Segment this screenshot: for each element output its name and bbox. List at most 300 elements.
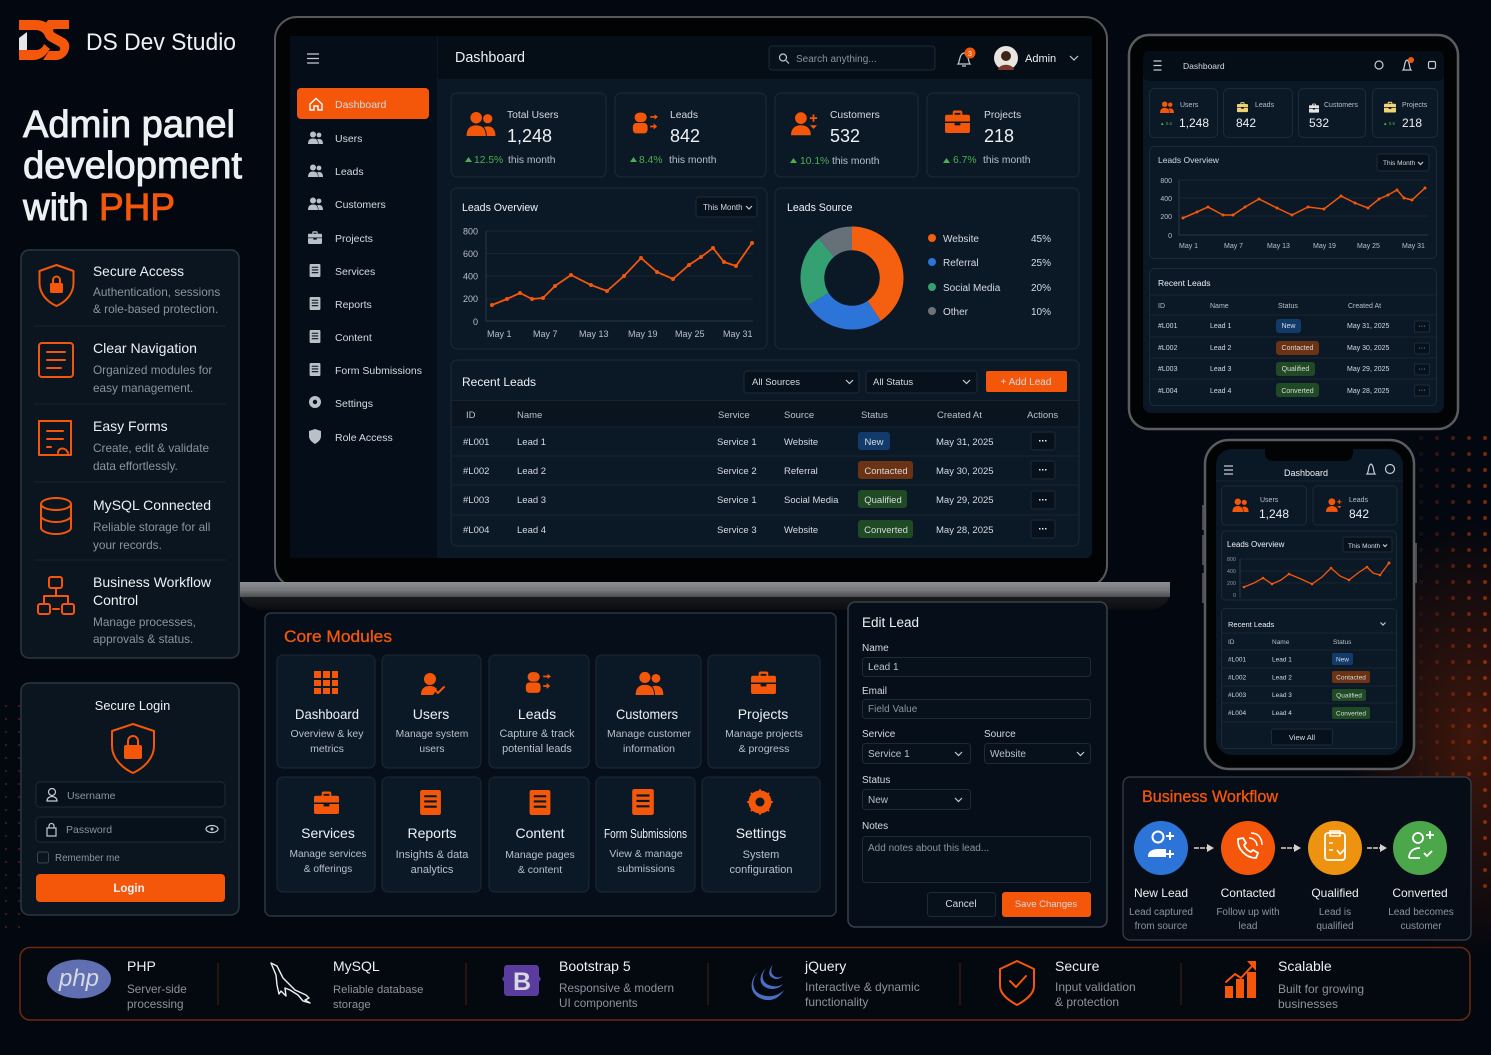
table: recent leads: Referral [784, 466, 818, 477]
table: recent leads: All Status [873, 377, 913, 388]
tech: Scalable: businesses [1278, 997, 1338, 1011]
laptop [240, 17, 1170, 610]
donut chart: leads source: Other [943, 307, 969, 318]
tablet table: Name [1210, 303, 1229, 310]
title [22, 104, 242, 229]
line chart: leads overview: May 7 [533, 329, 558, 339]
tech: jQuery [752, 958, 920, 1009]
tablet line chart: 400 [1160, 196, 1172, 203]
phone line chart: 0 [1233, 593, 1236, 599]
panel: secure login [21, 683, 239, 915]
module: Form Submissions: submissions [617, 863, 675, 875]
donut chart: leads source [775, 188, 1079, 349]
feature: MySQL Connected: your records. [93, 538, 162, 552]
module: Form Submissions [596, 777, 695, 892]
table: recent leads: #L001 [463, 437, 489, 448]
panel: core modules: Core Modules [284, 627, 392, 646]
line chart: leads overview: May 25 [675, 329, 705, 339]
module: Settings: configuration [730, 864, 792, 876]
stat: projects: 6.7% [953, 155, 976, 166]
step: Qualified: Lead is [1319, 907, 1351, 918]
tablet table: #L004 [1158, 388, 1178, 395]
tech: Scalable: Built for growing [1278, 982, 1364, 996]
module: Projects: Projects [738, 706, 788, 722]
phone table: Lead 1 [1272, 656, 1292, 664]
step: New Lead: New Lead [1134, 886, 1188, 900]
tech: Secure: Input validation [1055, 980, 1136, 994]
tech: Secure [1000, 958, 1136, 1009]
stat: total users [451, 93, 606, 177]
phone table: #L001 [1228, 656, 1246, 664]
step: New Lead [1129, 821, 1193, 932]
module: Services: Manage services [289, 849, 367, 860]
step: Converted: customer [1400, 921, 1442, 932]
phone table: Contacted [1336, 674, 1366, 682]
sidebar: Customers [335, 199, 386, 211]
donut chart: leads source: Leads Source [787, 202, 852, 214]
panel: edit lead form: Website [990, 749, 1026, 760]
input: username [36, 782, 225, 807]
step: Contacted [1216, 821, 1280, 932]
tablet stat cards: Customers [1324, 102, 1358, 109]
tablet [1129, 35, 1458, 429]
phone line chart: This Month [1348, 543, 1381, 550]
table: recent leads: + Add Lead [1001, 377, 1051, 388]
tablet line chart: Leads Overview [1158, 155, 1220, 165]
step: Qualified: qualified [1316, 921, 1354, 932]
arrow [1281, 844, 1301, 852]
tablet table: #L001 [1158, 323, 1178, 330]
line chart: leads overview: 400 [463, 272, 478, 282]
tablet stat cards: 842 [1236, 116, 1256, 130]
sidebar: Form Submissions [335, 365, 422, 377]
stat: projects: Projects [984, 110, 1021, 121]
tech: MySQL [271, 958, 423, 1011]
checkbox: remember me: Remember me [55, 853, 120, 864]
module: Reports: Reports [407, 825, 457, 841]
sidebar: Role Access [335, 432, 393, 444]
arrow [1194, 844, 1214, 852]
table: recent leads: May 31, 2025 [936, 437, 994, 448]
table: recent leads: Lead 4 [517, 525, 546, 536]
table: recent leads [451, 360, 1079, 546]
tech: Bootstrap 5 [502, 958, 674, 1010]
tablet table: May 28, 2025 [1347, 388, 1390, 395]
panel: business workflow [1123, 777, 1471, 940]
panel: secure login: Secure Login [95, 698, 170, 713]
sidebar: Users [335, 133, 362, 145]
table: recent leads: New [864, 437, 884, 448]
input: password [36, 817, 225, 842]
feature: Business Workflow Control [38, 574, 212, 646]
line chart: leads overview: Leads Overview [462, 202, 538, 214]
stat: projects: 218 [984, 126, 1014, 146]
feature: Clear Navigation [39, 340, 212, 395]
donut chart: leads source: 45% [1031, 234, 1051, 245]
phone table: #L003 [1228, 692, 1246, 699]
button: login [36, 874, 225, 902]
phone stat cards: Leads [1349, 497, 1369, 504]
module: Reports: Insights & data [396, 849, 469, 861]
tablet stat cards: Leads [1255, 102, 1275, 109]
module: Leads: potential leads [502, 743, 572, 755]
stat: total users: this month [508, 155, 556, 166]
table: recent leads: #L002 [463, 466, 489, 477]
feature: MySQL Connected: MySQL Connected [93, 497, 211, 513]
feature: Clear Navigation: Clear Navigation [93, 340, 197, 356]
table: recent leads: #L004 [463, 525, 489, 536]
module: Projects: & progress [739, 743, 789, 755]
table: recent leads: #L003 [463, 495, 489, 506]
step: Converted: Converted [1392, 886, 1448, 900]
phone table: Converted [1336, 710, 1366, 718]
tablet stat cards: ▲ 0.6 [1160, 121, 1172, 126]
step: Contacted: lead [1239, 921, 1257, 932]
line chart: leads overview: 600 [463, 249, 478, 259]
module: Settings: Settings [736, 825, 786, 841]
step: New Lead: Lead captured [1129, 907, 1193, 918]
line chart: leads overview [451, 188, 767, 349]
module: Reports: analytics [411, 864, 454, 876]
module: Dashboard: Overview & key [291, 728, 364, 740]
donut chart: leads source: 25% [1031, 258, 1051, 269]
tech: PHP [47, 958, 187, 1011]
tablet table: ··· [1418, 323, 1426, 330]
module: Form Submissions: View & manage [609, 848, 683, 860]
line chart: leads overview: May 19 [628, 329, 658, 339]
module: Projects: Manage projects [725, 728, 803, 740]
feature: Easy Forms: Create, edit & validate [93, 441, 210, 455]
step: Qualified: Qualified [1311, 886, 1359, 900]
phone line chart: 400 [1227, 569, 1236, 575]
feature: Easy Forms [39, 418, 210, 473]
tablet table: May 30, 2025 [1347, 345, 1390, 352]
module: Dashboard [277, 655, 375, 768]
tech: Bootstrap 5: Bootstrap 5 [559, 958, 631, 974]
tablet line chart: May 13 [1267, 243, 1290, 250]
donut chart: leads source: Website [943, 234, 979, 245]
tablet table: May 31, 2025 [1347, 323, 1390, 330]
tablet table: Contacted [1282, 345, 1314, 352]
step: Contacted: Follow up with [1216, 907, 1280, 918]
module: Customers: information [623, 743, 675, 755]
phone table: Qualified [1336, 692, 1362, 700]
panel: core modules [265, 613, 836, 916]
panel: edit lead form: Name [862, 643, 889, 654]
phone table: Lead 2 [1272, 674, 1292, 682]
donut chart: leads source: Social Media [943, 283, 1001, 294]
feature: Easy Forms: data effortlessly. [93, 459, 178, 473]
tablet line chart: May 25 [1357, 243, 1380, 250]
sidebar: Leads [335, 166, 364, 178]
table: recent leads: Lead 3 [517, 495, 546, 506]
phone stat cards: 1,248 [1259, 507, 1289, 521]
top bar: Admin [1025, 53, 1056, 65]
tablet line chart: May 7 [1224, 243, 1243, 250]
laptop base [240, 582, 1170, 610]
tech: PHP: processing [127, 998, 184, 1011]
module: Content: & content [518, 864, 562, 876]
line chart: leads overview: May 1 [487, 329, 512, 339]
tablet table: Converted [1281, 388, 1314, 395]
tablet table: ID [1158, 303, 1165, 310]
panel: features [21, 250, 239, 658]
module: Settings [702, 777, 820, 892]
tech: PHP: PHP [127, 958, 156, 974]
phone table: #L002 [1228, 674, 1246, 682]
tech: Scalable [1225, 958, 1364, 1011]
tablet stat cards: Projects [1402, 102, 1428, 109]
table: recent leads: Recent Leads [462, 375, 536, 389]
step: New Lead: from source [1135, 921, 1188, 932]
module: Content: Content [515, 825, 565, 841]
sidebar [290, 36, 437, 558]
feature: Clear Navigation: Organized modules for [93, 363, 212, 377]
module: Services [277, 777, 375, 892]
tech: MySQL: MySQL [333, 958, 380, 974]
tablet line chart: 800 [1160, 178, 1172, 185]
tablet line chart: May 19 [1313, 243, 1336, 250]
table: recent leads: Social Media [784, 495, 839, 506]
table: recent leads: Source [784, 410, 814, 421]
module: Users: users [419, 744, 445, 755]
tablet stat cards: Users [1180, 102, 1199, 109]
table: recent leads: Service 1 [717, 437, 757, 448]
tablet line chart: May 31 [1402, 243, 1425, 250]
module: Users [382, 655, 481, 768]
phone table: Lead 4 [1272, 710, 1292, 717]
module: Form Submissions: Form Submissions [604, 826, 687, 841]
phone table: #L004 [1228, 710, 1246, 717]
table: recent leads: Service 3 [717, 525, 757, 536]
feature: Business Workflow Control: Business Workflow [93, 574, 212, 590]
tablet table: Created At [1348, 303, 1381, 310]
table: recent leads: May 28, 2025 [936, 525, 994, 536]
feature: Business Workflow Control: approvals & status. [93, 632, 193, 646]
phone line chart: Leads Overview [1227, 540, 1285, 549]
panel: edit lead form: Save Changes [1015, 899, 1077, 910]
laptop screen [290, 36, 1092, 558]
step: Contacted: Contacted [1221, 886, 1275, 900]
module: Customers [596, 655, 701, 768]
table: recent leads: Service [718, 410, 750, 421]
top bar: Search anything... [796, 54, 877, 65]
phone line chart [1222, 531, 1396, 600]
feature: Business Workflow Control: Control [93, 592, 138, 608]
tech: PHP: php [58, 965, 99, 992]
phone table: New [1336, 656, 1349, 664]
stat: customers [775, 93, 918, 177]
step: Converted: Lead becomes [1388, 907, 1454, 918]
donut chart: leads source: Referral [943, 258, 979, 269]
sidebar: Services [335, 266, 375, 278]
tablet table: Qualified [1282, 366, 1309, 373]
table: recent leads: May 29, 2025 [936, 495, 994, 506]
feature: MySQL Connected [41, 497, 211, 552]
tablet table: #L003 [1158, 366, 1178, 373]
tech: Secure: Secure [1055, 958, 1100, 974]
module: Customers: Customers [616, 706, 678, 722]
table: recent leads: Service 2 [717, 466, 757, 477]
stat: leads [615, 93, 766, 177]
tablet table: New [1281, 323, 1296, 330]
arrow [1367, 844, 1387, 852]
table: recent leads: Converted [864, 525, 908, 536]
phone [1202, 440, 1417, 769]
phone stat cards [1222, 486, 1397, 525]
phone table: Name [1272, 639, 1290, 646]
table: recent leads: Name [517, 410, 542, 421]
stat: customers: this month [832, 156, 880, 167]
phone table [1222, 608, 1396, 748]
table: recent leads: Lead 2 [517, 466, 546, 477]
tablet line chart: This Month [1383, 160, 1416, 167]
tablet table: Status [1278, 303, 1298, 310]
table: recent leads: Contacted [864, 466, 908, 477]
panel: tech stack [20, 948, 1470, 1020]
panel: edit lead form: Field Value [868, 704, 918, 715]
phone table: ID [1228, 639, 1235, 646]
table: recent leads: Actions [1027, 410, 1058, 421]
tech: jQuery: Interactive & dynamic [805, 980, 920, 994]
tablet: Dashboard [1183, 61, 1225, 71]
table: recent leads: Created At [937, 410, 982, 421]
phone table: Status [1333, 639, 1352, 646]
tablet table: Lead 3 [1210, 366, 1232, 373]
tech: Bootstrap 5: UI components [559, 997, 638, 1010]
tablet line chart [1150, 146, 1436, 258]
title: Admin panel [23, 104, 235, 146]
phone table: View All [1289, 733, 1315, 742]
donut chart: leads source: 20% [1031, 283, 1051, 294]
tablet table: Lead 2 [1210, 345, 1232, 352]
tablet stat cards: 532 [1309, 116, 1329, 130]
module: Settings: System [743, 849, 779, 861]
module: Customers: Manage customer [607, 728, 692, 740]
phone line chart: 800 [1227, 557, 1236, 563]
tablet line chart: May 1 [1179, 243, 1198, 250]
line chart: leads overview: This Month [703, 203, 743, 212]
phone: Dashboard [1284, 468, 1328, 478]
phone stat cards: 842 [1349, 507, 1369, 521]
input: username: Username [67, 790, 116, 802]
stat: projects [927, 93, 1079, 177]
stat: customers: 10.1% [800, 156, 829, 167]
tech: jQuery: jQuery [804, 958, 846, 974]
tech: jQuery: functionality [805, 995, 868, 1009]
tablet line chart: 0 [1168, 233, 1172, 240]
panel: edit lead form: Cancel [945, 899, 977, 910]
top bar: 3 [968, 51, 972, 58]
tablet table: Recent Leads [1158, 278, 1210, 288]
module: Users: Users [413, 706, 449, 722]
sidebar: Reports [335, 299, 372, 311]
logo: DS Dev Studio [19, 20, 236, 60]
module: Users: Manage system [396, 729, 468, 740]
logo: DS Dev Studio: DS Dev Studio [86, 29, 236, 56]
stat: leads: Leads [670, 110, 698, 121]
tablet table: ··· [1418, 345, 1426, 352]
line chart: leads overview: May 13 [579, 329, 609, 339]
feature: MySQL Connected: Reliable storage for all [93, 520, 210, 534]
tablet stat cards: ▲ 0.6 [1383, 121, 1395, 126]
tech: MySQL: Reliable database [333, 984, 423, 996]
module: Dashboard: Dashboard [295, 706, 359, 722]
stat: leads: 842 [670, 126, 700, 146]
feature: Easy Forms: Easy Forms [93, 418, 168, 434]
table: recent leads: Website [784, 437, 818, 448]
feature: Secure Access [40, 263, 220, 316]
table: recent leads: Qualified [864, 495, 902, 506]
tablet table: May 29, 2025 [1347, 366, 1390, 373]
feature: Secure Access: & role-based protection. [93, 302, 218, 316]
tablet table: Lead 1 [1210, 323, 1232, 330]
table: recent leads: ID [466, 410, 476, 421]
tech: Scalable: Scalable [1278, 958, 1332, 974]
tech: MySQL: storage [333, 999, 371, 1011]
panel: edit lead form: Status [862, 775, 890, 786]
icon: shield lock [112, 724, 154, 773]
tablet line chart: 200 [1160, 214, 1172, 221]
step: Converted [1388, 821, 1454, 932]
tech: PHP: Server-side [127, 983, 187, 996]
donut chart: leads source: 10% [1031, 307, 1051, 318]
feature: Secure Access: Secure Access [93, 263, 184, 279]
sidebar: Projects [335, 233, 373, 245]
table: recent leads: Status [861, 410, 888, 421]
phone table: Recent Leads [1228, 620, 1275, 629]
tech: Bootstrap 5: Responsive & modern [559, 982, 674, 995]
stat: customers: Customers [830, 110, 880, 121]
sidebar: Settings [335, 398, 373, 410]
panel: edit lead form: Service 1 [868, 749, 910, 760]
tech: Bootstrap 5: B [513, 968, 531, 996]
title: with PHP [22, 187, 175, 229]
title: development [23, 145, 242, 187]
tablet table: ··· [1418, 387, 1426, 394]
module: Dashboard: metrics [310, 743, 344, 755]
line chart: leads overview: 0 [473, 317, 478, 327]
feature: Business Workflow Control: Manage processes, [93, 615, 196, 629]
panel: edit lead form: Add notes about this lead... [868, 843, 989, 854]
sidebar: Dashboard [335, 99, 387, 111]
top bar: Dashboard [455, 50, 525, 66]
phone stat cards: Users [1260, 497, 1279, 504]
panel: business workflow: Business Workflow [1142, 788, 1278, 806]
tablet stat cards [1150, 88, 1438, 138]
panel: edit lead form: Lead 1 [868, 662, 899, 673]
table: recent leads: Website [784, 525, 818, 536]
top bar [455, 46, 1078, 70]
module: Projects [708, 655, 820, 768]
phone line chart: 200 [1227, 581, 1236, 587]
stat: total users: 12.5% [474, 155, 503, 166]
step: Qualified [1308, 821, 1362, 932]
panel: edit lead form: Service [862, 729, 896, 740]
tablet stat cards: 218 [1402, 116, 1422, 130]
module: Services: Services [301, 825, 355, 841]
tablet table [1150, 268, 1436, 406]
input: password: Password [66, 824, 112, 836]
module: Content: Manage pages [505, 849, 575, 861]
line chart: leads overview: 800 [463, 226, 478, 236]
module: Services: & offerings [304, 864, 352, 875]
tech: Secure: & protection [1055, 995, 1119, 1009]
stat: customers: 532 [830, 126, 860, 146]
table: recent leads: All Sources [752, 377, 800, 388]
panel: edit lead form: Notes [862, 821, 888, 832]
module: Leads [489, 655, 589, 768]
